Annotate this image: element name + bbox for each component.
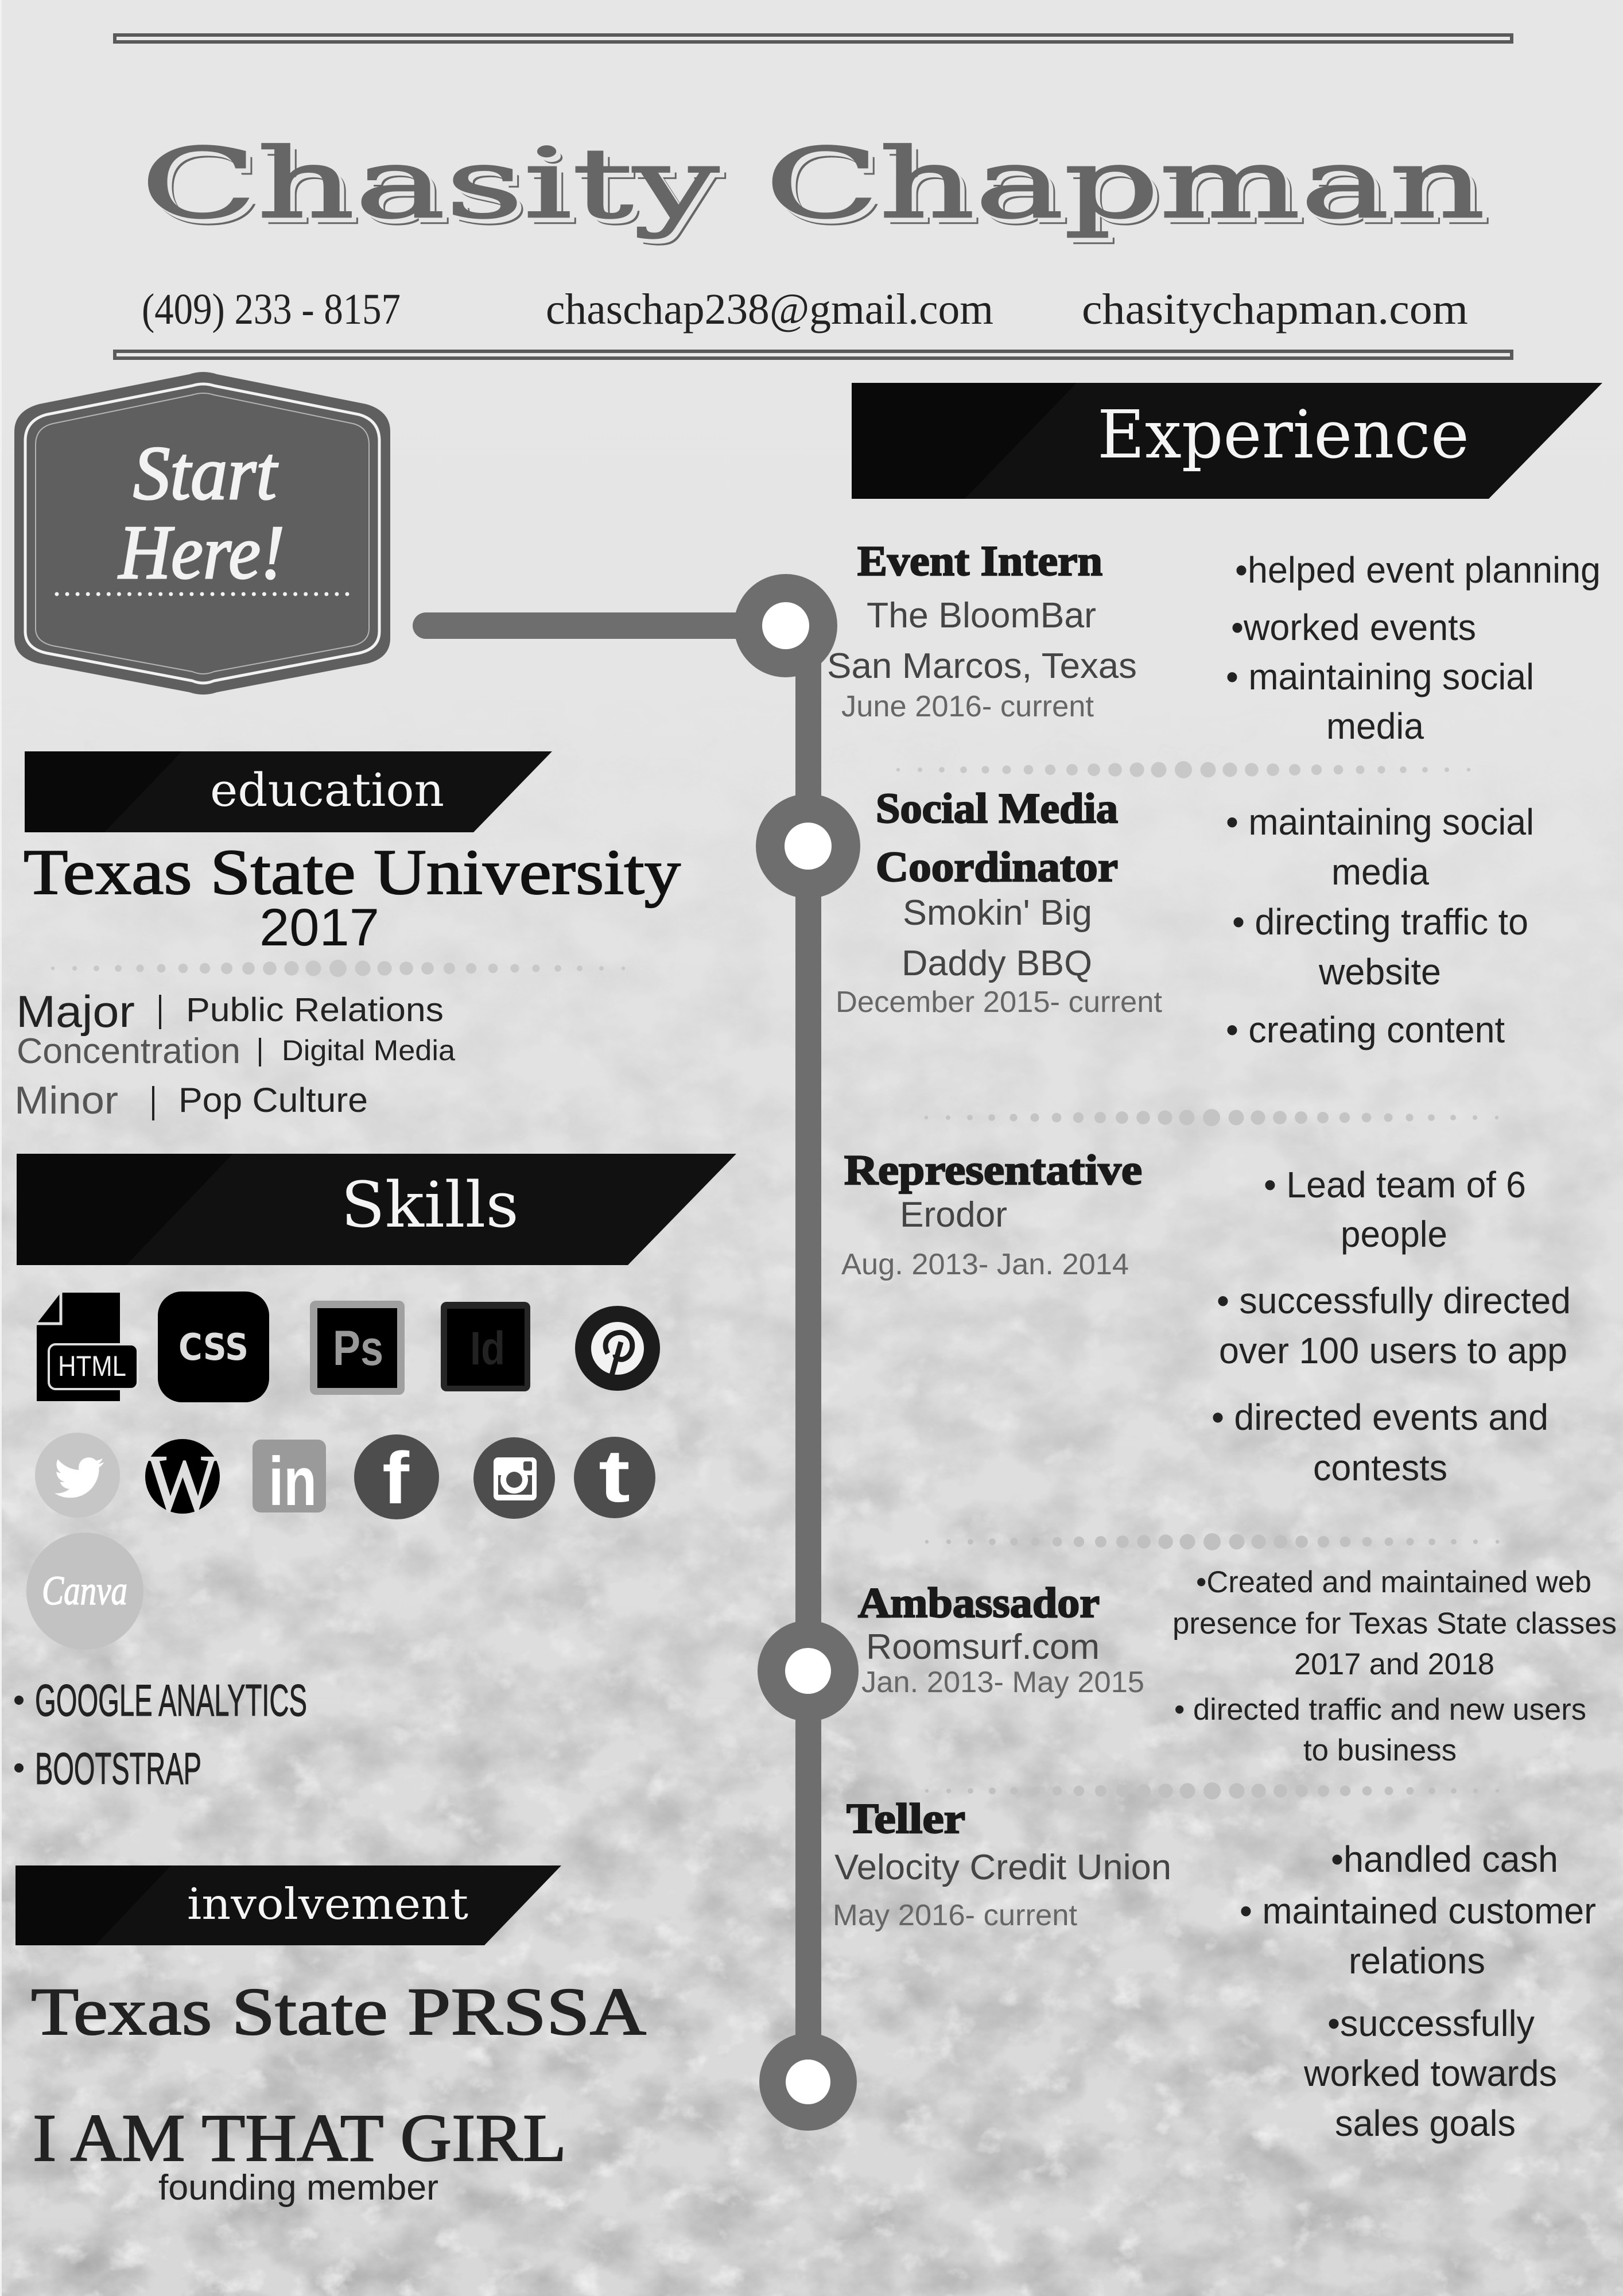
job title: Event Intern — [857, 538, 1102, 585]
duties: website — [1318, 951, 1441, 992]
icon: canva — [26, 1533, 143, 1650]
duties: • maintained customer — [1240, 1890, 1596, 1932]
job title: Ambassador — [858, 1580, 1100, 1627]
timeline node 2 — [756, 794, 860, 898]
website: chasitychapman.com — [1082, 285, 1468, 333]
concentration — [17, 1031, 455, 1071]
university: Texas State University — [24, 837, 681, 908]
badge text: here: Here! — [118, 510, 285, 595]
timeline vertical line — [795, 649, 821, 2084]
founding member: founding member — [158, 2168, 438, 2208]
dates: Jan. 2013- May 2015 — [861, 1666, 1144, 1699]
icon: indesign: Id — [470, 1322, 505, 1375]
minor: Minor — [14, 1079, 118, 1122]
concentration: Concentration — [17, 1031, 240, 1071]
education details — [14, 837, 681, 1122]
experience heading: Experience — [1097, 397, 1469, 474]
dotted divider — [51, 960, 625, 977]
divider dots 1 — [896, 761, 1470, 778]
badge dotted line — [57, 592, 347, 596]
job 1: event intern — [827, 538, 1601, 747]
icon: photoshop — [310, 1301, 405, 1395]
skills heading: Skills — [341, 1168, 519, 1242]
minor — [14, 1079, 368, 1122]
dates: December 2015- current — [836, 986, 1163, 1019]
job title — [876, 785, 1118, 891]
icon: wordpress: W — [147, 1438, 218, 1529]
employer: Smokin' Big — [903, 893, 1092, 933]
divider dots 4 — [925, 1782, 1499, 1799]
timeline node 4 — [759, 2033, 857, 2131]
duties: contests — [1313, 1447, 1447, 1488]
timeline node 1 — [734, 574, 837, 677]
experience banner — [852, 383, 1602, 499]
duties: • Lead team of 6 — [1264, 1164, 1526, 1205]
texas state prssa: Texas State PRSSA — [31, 1974, 646, 2049]
duties: media — [1326, 705, 1424, 747]
timeline node 3 — [758, 1620, 859, 1721]
duties: •Created and maintained web — [1196, 1565, 1591, 1599]
duties: • maintaining social — [1226, 801, 1534, 843]
education banner — [25, 751, 552, 832]
duties: • successfully directed — [1217, 1280, 1571, 1321]
minor: Pop Culture — [178, 1081, 368, 1119]
duties: • maintaining social — [1226, 656, 1534, 697]
job title: Social Media — [876, 785, 1118, 832]
location: San Marcos, Texas — [827, 646, 1137, 686]
icon: canva: Canva — [42, 1568, 127, 1614]
employer: The BloomBar — [867, 596, 1096, 635]
phone: (409) 233 - 8157 — [142, 285, 401, 333]
icon: facebook — [354, 1434, 439, 1519]
bootstrap — [14, 1743, 201, 1794]
title: name with offset shadow — [141, 127, 1492, 246]
job 5: teller — [833, 1795, 1596, 2144]
icon: css — [158, 1292, 269, 1402]
title: name with offset shadow: Chasity — [141, 127, 719, 240]
header lower double rule — [115, 351, 1512, 358]
duties: • directed events and — [1212, 1397, 1548, 1438]
duties: people — [1341, 1213, 1447, 1255]
duties: to business — [1303, 1733, 1457, 1767]
job 3: representative — [841, 1147, 1571, 1488]
education heading: education — [210, 763, 444, 817]
involvement items — [31, 1974, 646, 2208]
duties: worked towards — [1303, 2053, 1557, 2094]
bootstrap: BOOTSTRAP — [35, 1743, 201, 1794]
icon: instagram — [473, 1437, 555, 1519]
job title: Representative — [844, 1147, 1142, 1194]
google analytics: GOOGLE ANALYTICS — [35, 1675, 307, 1725]
timeline connector from badge — [426, 612, 775, 639]
employer: Velocity Credit Union — [834, 1848, 1171, 1887]
duties — [1240, 1839, 1596, 2144]
skills banner — [17, 1154, 736, 1265]
duties: •helped event planning — [1235, 549, 1601, 591]
duties — [1212, 1164, 1571, 1488]
duties: 2017 and 2018 — [1294, 1647, 1494, 1681]
job 4: ambassador — [858, 1565, 1617, 1767]
job title: Coordinator — [876, 844, 1118, 891]
duties: •successfully — [1327, 2003, 1535, 2044]
dates: May 2016- current — [833, 1899, 1078, 1932]
employer: Roomsurf.com — [866, 1627, 1100, 1667]
duties: • directing traffic to — [1232, 901, 1528, 943]
icon: css: CSS — [178, 1327, 249, 1369]
icon: tumblr — [574, 1434, 655, 1518]
icon: html file — [37, 1293, 138, 1401]
icon: tumblr: t — [599, 1434, 630, 1518]
top double rule — [115, 35, 1512, 42]
i am that girl: I AM THAT GIRL — [33, 2100, 566, 2175]
start here badge — [14, 372, 390, 695]
major: Public Relations — [186, 991, 444, 1029]
concentration: Digital Media — [282, 1034, 455, 1066]
divider dots 3 — [925, 1533, 1499, 1550]
duties: • directed traffic and new users — [1174, 1693, 1586, 1727]
duties: •handled cash — [1331, 1839, 1558, 1880]
icon: linkedin: in — [269, 1443, 317, 1520]
divider dots 2 — [925, 1109, 1498, 1126]
title: name with offset shadow: Chapman — [765, 127, 1485, 240]
email: chaschap238@gmail.com — [546, 285, 993, 333]
badge text: start: Start — [133, 430, 278, 515]
duties: sales goals — [1335, 2103, 1516, 2144]
duties: presence for Texas State classes — [1172, 1607, 1617, 1640]
involvement banner — [15, 1865, 561, 1945]
dates: June 2016- current — [841, 690, 1094, 723]
involvement heading: involvement — [187, 1879, 468, 1929]
icon: facebook: f — [382, 1437, 409, 1519]
icon: twitter — [35, 1433, 120, 1518]
employer: Daddy BBQ — [902, 944, 1092, 983]
duties: • creating content — [1226, 1009, 1505, 1050]
icon: photoshop: Ps — [333, 1321, 383, 1376]
duties — [1226, 801, 1534, 1050]
major — [16, 986, 444, 1037]
major: Major — [16, 986, 135, 1037]
employer — [902, 893, 1092, 983]
google analytics — [14, 1675, 307, 1725]
employer: Erodor — [900, 1195, 1007, 1235]
icon: pinterest — [575, 1306, 660, 1391]
job 2: social media coordinator — [836, 785, 1534, 1050]
graduation year: 2017 — [259, 898, 379, 957]
skill list — [14, 1675, 307, 1794]
duties — [1226, 549, 1601, 747]
duties: over 100 users to app — [1219, 1330, 1567, 1371]
contact details — [142, 285, 1468, 333]
duties: relations — [1349, 1940, 1485, 1981]
duties — [1172, 1565, 1617, 1767]
icon: indesign — [441, 1302, 530, 1391]
dates: Aug. 2013- Jan. 2014 — [841, 1248, 1129, 1281]
job title: Teller — [847, 1795, 965, 1843]
duties: •worked events — [1231, 607, 1476, 648]
duties: media — [1331, 851, 1429, 893]
icon: html file: HTML — [58, 1350, 126, 1382]
